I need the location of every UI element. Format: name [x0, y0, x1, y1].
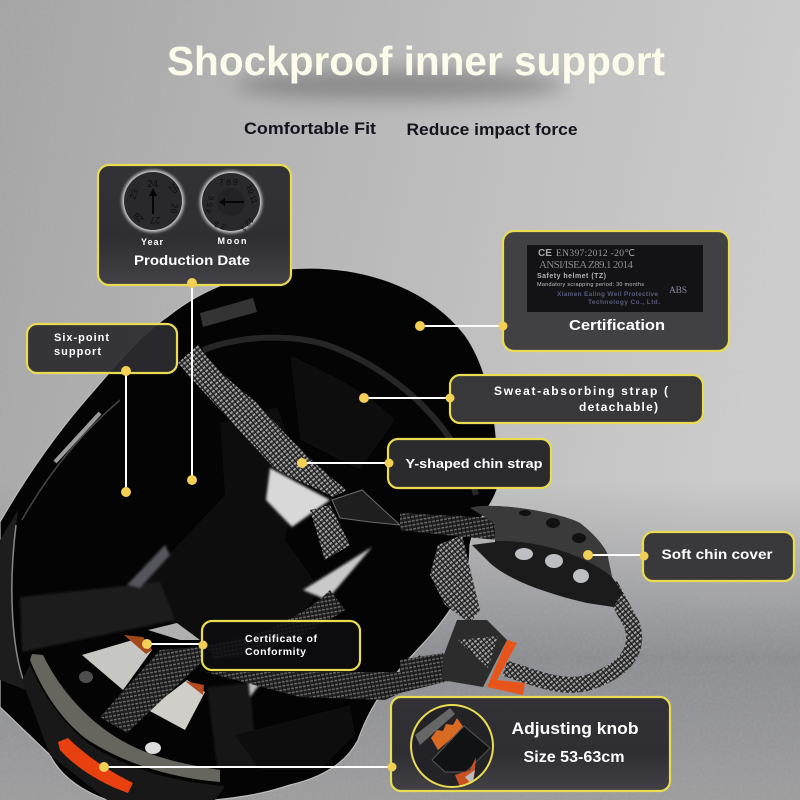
- certification label image: Safety helmet (TZ): [537, 273, 606, 280]
- month dial: 7 8 9: [219, 177, 238, 187]
- panel label: [245, 633, 318, 658]
- panel label: Size 53-63cm: [524, 749, 624, 766]
- callout: sweat-absorbing strap: [359, 375, 703, 423]
- chin strap and clip: [430, 535, 480, 623]
- panel label: [512, 719, 638, 766]
- buckle: [332, 490, 400, 525]
- panel: [503, 231, 729, 351]
- panel label: Soft chin cover: [662, 547, 773, 562]
- grey webbing strap: [178, 345, 347, 497]
- certification label image: [527, 245, 703, 312]
- warning labels: [82, 637, 152, 690]
- inner papers: [127, 468, 372, 697]
- month dial: 12 1: [238, 216, 255, 234]
- knob inset image: [411, 705, 493, 790]
- helmet: [0, 268, 634, 800]
- year dial: 23: [127, 188, 140, 201]
- year dial: 28: [131, 211, 145, 225]
- certification label image: Technology Co., Ltd.: [588, 299, 660, 306]
- certification label image: ANSI/ISEA Z89.1 2014: [539, 259, 634, 271]
- callout: adjusting knob: [99, 697, 670, 791]
- leader line: [297, 458, 389, 468]
- panel: [98, 165, 291, 285]
- panel label: [54, 332, 109, 358]
- year dial: 26: [168, 203, 180, 214]
- leader line: [583, 550, 644, 560]
- month dial: [200, 171, 262, 234]
- callout: certificate of conformity: [142, 621, 360, 670]
- orange adjuster: [487, 640, 525, 695]
- panel label: Six-point: [54, 332, 109, 344]
- top pad and sweat band: [200, 298, 257, 327]
- panel label: support: [54, 346, 101, 358]
- panel: [388, 439, 551, 488]
- callout: production date: Moon: [218, 236, 246, 246]
- subtitle: reduce impact force: Reduce impact force: [406, 121, 578, 139]
- fabric pads: [20, 355, 395, 770]
- orange reflector: [58, 738, 133, 793]
- panel label: Y-shaped chin strap: [406, 456, 543, 471]
- left rim and vent: [22, 400, 120, 520]
- year dial: 25: [167, 181, 181, 195]
- panel label: Production Date: [134, 252, 250, 268]
- soft chin cover: [470, 506, 623, 607]
- panel: [643, 532, 794, 581]
- panel: [450, 375, 703, 423]
- leader line: [99, 762, 392, 772]
- panel: [391, 697, 670, 791]
- panel label: detachable): [579, 400, 658, 414]
- year dial: 24: [147, 179, 159, 190]
- certification label image: EN397:2012 -20℃: [556, 249, 635, 259]
- bottom rim: [22, 665, 225, 800]
- callout: y-shaped chin strap: [297, 439, 551, 488]
- month dial: 2 3: [213, 219, 227, 232]
- callout: production date: [98, 165, 291, 485]
- lower strap across: [100, 647, 207, 733]
- callout: six-point support: [27, 324, 177, 497]
- month dial: 4 5 6: [204, 195, 216, 214]
- panel label: Certificate of: [245, 633, 318, 645]
- panel label: Adjusting knob: [512, 719, 638, 738]
- panel label: Sweat-absorbing strap (: [494, 384, 668, 398]
- leader line: [121, 371, 131, 497]
- leader line: [359, 393, 450, 403]
- panel label: Conformity: [245, 646, 306, 658]
- year dial: [122, 170, 184, 232]
- panel label: Certification: [569, 318, 665, 334]
- callout: certification: [415, 231, 729, 351]
- month dial: 10 11: [244, 184, 259, 205]
- leader line: [415, 321, 503, 331]
- leader line: [187, 286, 197, 485]
- year dial: 27: [150, 215, 160, 225]
- foam edge: [30, 654, 220, 782]
- dial captions: Year: [141, 237, 163, 247]
- helmet shell: [0, 268, 498, 800]
- panel: [27, 324, 177, 373]
- title: Shockproof inner support: [167, 38, 665, 84]
- certification label image: Mandatory scrapping period: 30 months: [537, 282, 644, 288]
- leader line: [142, 639, 203, 649]
- certification label image: CE: [538, 248, 552, 259]
- callout: soft chin cover: [583, 532, 794, 581]
- certification label image: ABS: [669, 286, 687, 296]
- panel: [202, 621, 360, 670]
- panel label: [494, 384, 668, 414]
- subtitle: comfortable fit: Comfortable Fit: [244, 120, 377, 138]
- certification label image: Xiamen Ealing Weil Protective: [557, 291, 658, 298]
